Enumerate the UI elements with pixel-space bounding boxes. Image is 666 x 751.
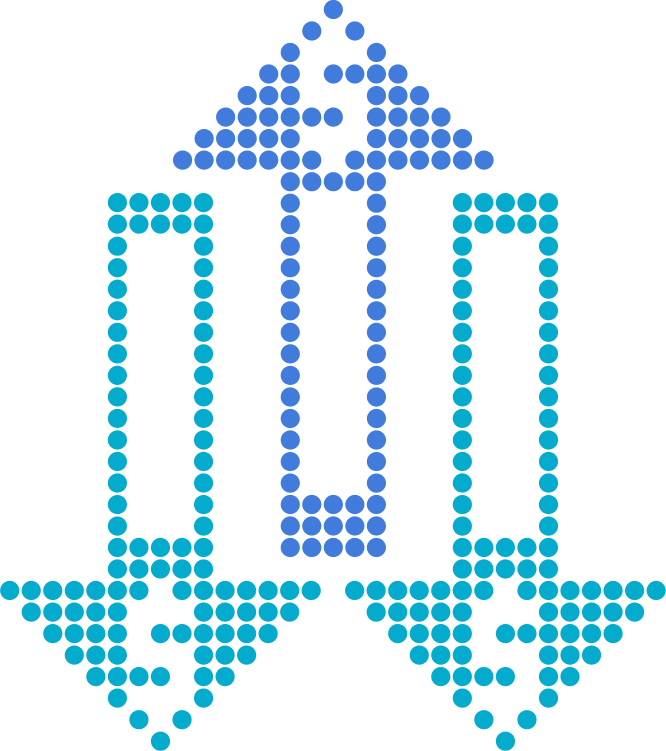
arrow shaft: left teal (117, 203, 204, 569)
arrow shaft: blue (290, 182, 376, 547)
arrow: right teal dotted arrow pointing down (355, 203, 656, 741)
arrow shaft: right teal (462, 203, 549, 569)
arrow head: left teal down (10, 590, 311, 741)
arrow: left teal dotted arrow pointing down (10, 203, 311, 741)
arrow: centre blue dotted arrow pointing up (183, 10, 484, 548)
arrow head: right teal down (355, 590, 656, 741)
arrow head: blue up (183, 10, 484, 160)
